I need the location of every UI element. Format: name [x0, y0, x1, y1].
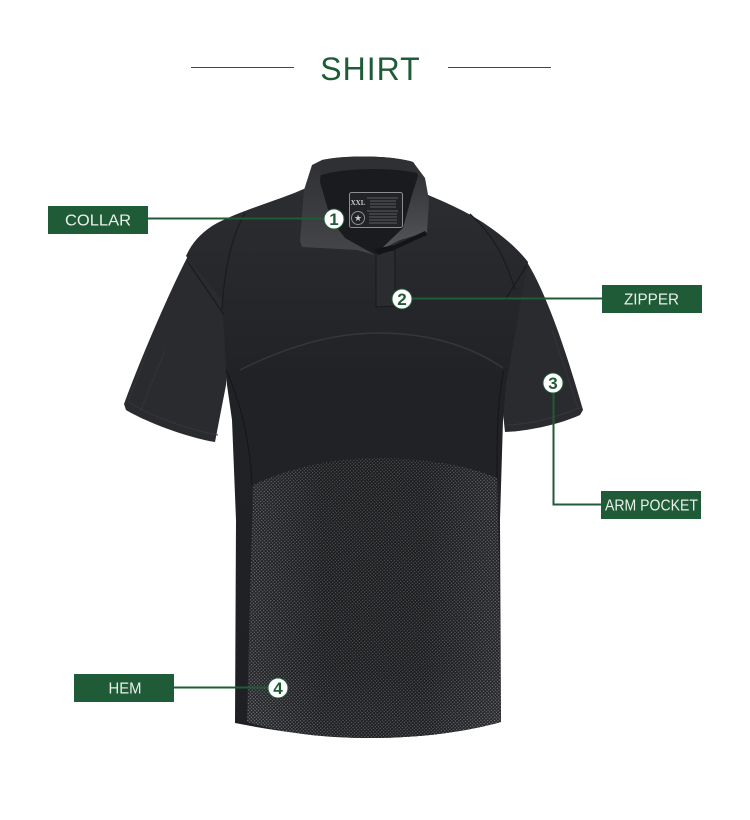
shirt body	[186, 188, 528, 738]
mesh fade	[247, 458, 501, 738]
callout: collar: COLLAR	[65, 212, 131, 230]
collar back inner	[314, 156, 425, 254]
left sleeve	[124, 252, 235, 442]
callout: zipper: ZIPPER	[624, 292, 679, 308]
chest seam	[240, 333, 503, 370]
neck label	[350, 192, 402, 228]
callout: arm pocket: ARM POCKET	[605, 498, 698, 514]
mesh shading	[247, 458, 501, 738]
sleeve hems	[128, 402, 582, 435]
sleeve stripes	[128, 345, 165, 412]
collar left flap	[300, 160, 375, 255]
placket	[376, 250, 395, 307]
callout: collar	[48, 206, 344, 234]
callout: collar: 1	[329, 210, 339, 229]
right sleeve	[495, 262, 583, 432]
callout: hem: 4	[273, 679, 283, 698]
raglan seams	[188, 213, 527, 315]
collar right flap	[380, 162, 429, 250]
callout: arm pocket: 3	[548, 374, 558, 393]
callout: zipper: 2	[397, 290, 407, 309]
shirt illustration	[124, 156, 583, 738]
neck label: XXL	[351, 199, 366, 207]
callout: arm pocket	[543, 373, 701, 519]
side panel seams	[226, 370, 504, 485]
callout: hem: HEM	[108, 680, 142, 698]
title: SHIRT	[320, 51, 421, 87]
collar closure	[374, 231, 427, 255]
mesh panel	[247, 458, 501, 738]
callout: hem	[74, 674, 288, 702]
collar upper band	[318, 156, 421, 176]
neck label: ★	[354, 214, 362, 224]
callout: zipper	[392, 285, 702, 313]
